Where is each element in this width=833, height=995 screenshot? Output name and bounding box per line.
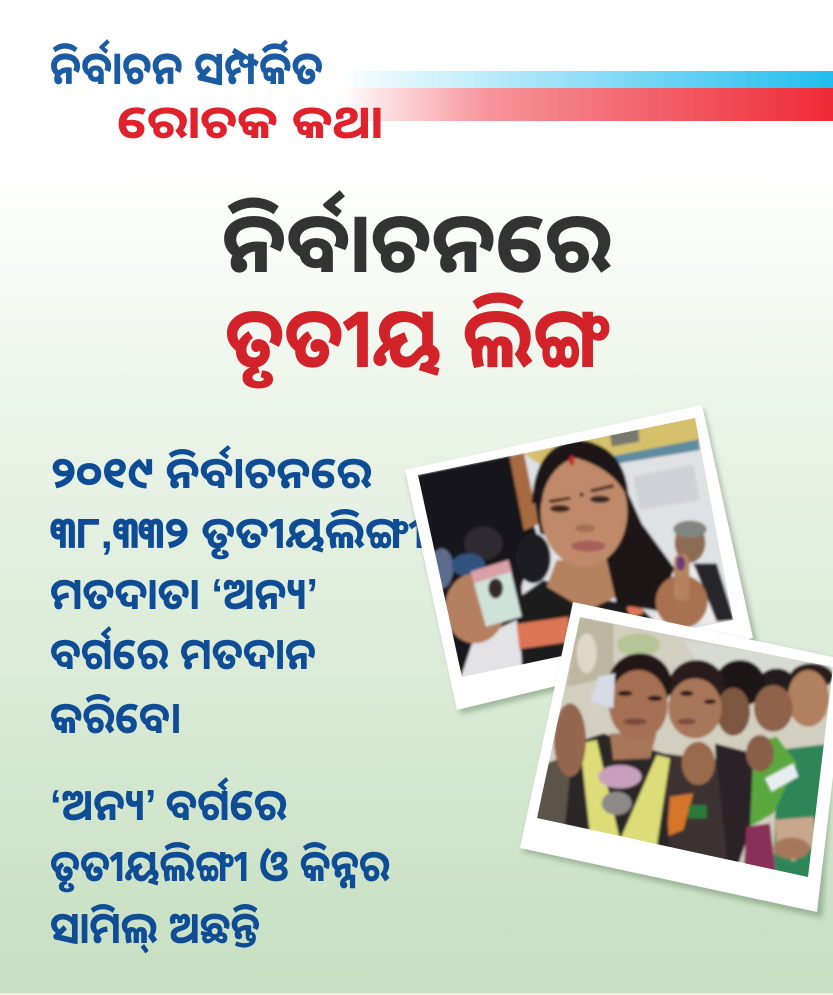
main title — [222, 190, 612, 389]
line 6: ‘ଅନ୍ୟ’ ବର୍ଗରେ — [50, 777, 287, 830]
blue gradient bar — [335, 71, 833, 88]
title line 1: ନିର୍ବାଚନରେ — [222, 190, 612, 290]
line 7: ତୃତୀୟଲିଙ୍ଗୀ ଓ କିନ୍ନର — [50, 841, 390, 893]
line 5: କରିବେ। — [50, 693, 182, 743]
line 4: ବର୍ଗରେ ମତଦାନ — [50, 626, 316, 679]
red gradient bar — [340, 88, 833, 121]
line 1: ୨୦୧୯ ନିର୍ବାଚନରେ — [50, 445, 372, 498]
title line 2: ତୃତୀୟ ଲିଙ୍ଗ — [225, 291, 610, 389]
header line: blue: ନିର୍ବାଚନ ସମ୍ପର୍କିତ — [50, 39, 323, 94]
header banner — [50, 39, 833, 148]
line 3: ମତଦାତା ‘ଅନ୍ୟ’ — [50, 570, 318, 619]
line 8: ସାମିଲ୍ ଅଛନ୍ତି — [50, 903, 260, 954]
header line: red: ରୋଚକ କଥା — [117, 96, 383, 148]
photo 2: group showing inked fingers — [520, 602, 833, 918]
body text — [50, 445, 425, 954]
line 2: ୩୮,୩୩୨ ତୃତୀୟଲିଙ୍ଗୀ — [50, 508, 425, 560]
photo 1: woman with voter card — [400, 400, 757, 714]
